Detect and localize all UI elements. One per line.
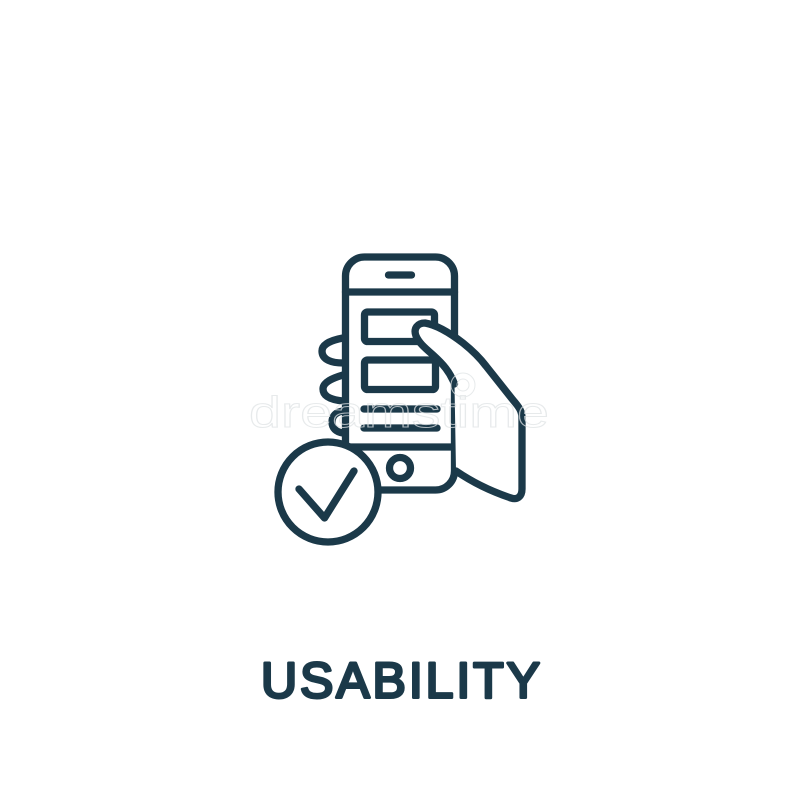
title: USABILITY bbox=[261, 652, 540, 708]
icon: phone bbox=[346, 257, 454, 490]
icon: fingers bbox=[322, 338, 343, 433]
icon: hand holding phone bbox=[278, 257, 522, 542]
icon: thumb and palm bbox=[415, 323, 522, 499]
icon: check badge bbox=[278, 442, 378, 542]
screen text lines bbox=[364, 409, 437, 428]
icon: speaker bbox=[388, 271, 412, 279]
icon: home button bbox=[390, 458, 410, 478]
icon: check mark bbox=[299, 471, 354, 518]
screen card two bbox=[364, 360, 436, 390]
watermark: dreamstime bbox=[249, 388, 549, 437]
watermark bbox=[249, 373, 549, 437]
screen card one bbox=[364, 312, 434, 342]
